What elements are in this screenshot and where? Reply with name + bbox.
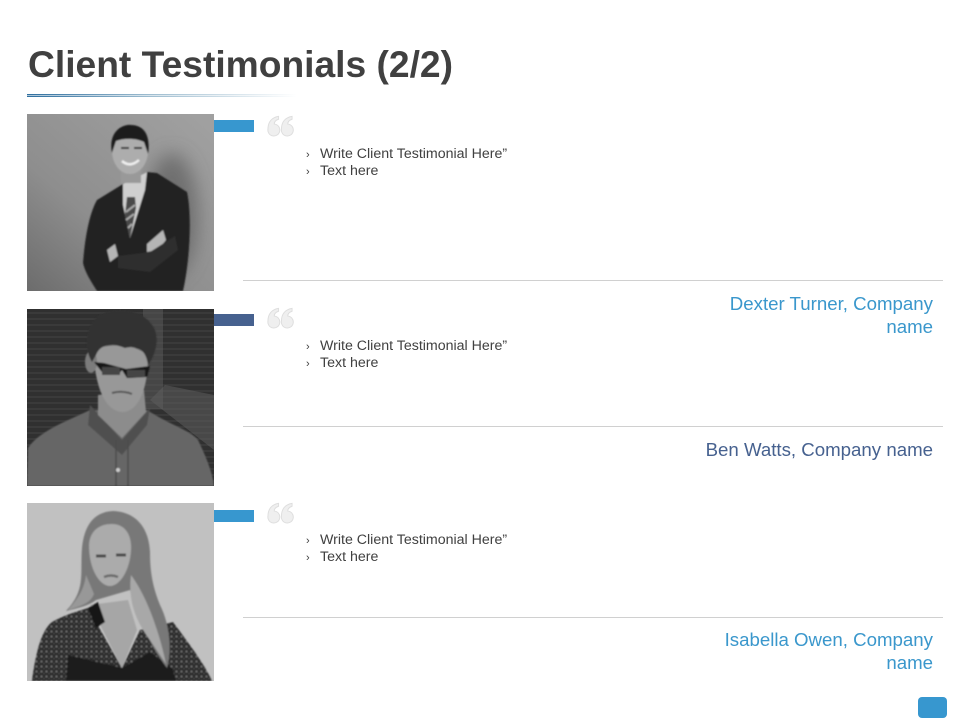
name: Isabella Owen: name — [886, 652, 933, 673]
testimonial text 2: Write Client Testimonial Here” — [320, 338, 507, 354]
testimonial text 3: Write Client Testimonial Here” — [320, 532, 507, 548]
testimonial text 2: › — [306, 341, 310, 353]
testimonial text 3 — [306, 532, 507, 565]
testimonial text 1: › — [306, 149, 310, 161]
quote icon 1 — [268, 116, 294, 136]
testimonial text 1: › — [306, 166, 310, 178]
testimonial text 1: Write Client Testimonial Here” — [320, 146, 507, 162]
title underline — [27, 94, 284, 97]
name: Dexter Turner — [730, 293, 933, 337]
testimonial text 2: › — [306, 358, 310, 370]
page number badge — [918, 697, 947, 718]
testimonial text 2 — [306, 338, 507, 371]
testimonial text 1 — [306, 146, 507, 179]
accent bar 1 — [214, 120, 254, 132]
quote icon 2 — [268, 308, 294, 328]
name: Isabella Owen — [725, 629, 933, 673]
name: Ben Watts: Ben Watts, Company name — [706, 439, 933, 460]
testimonial text 3: › — [306, 552, 310, 564]
photo: Dexter Turner portrait — [27, 114, 214, 291]
name: Dexter Turner: name — [886, 316, 933, 337]
testimonial text 3: › — [306, 535, 310, 547]
accent bar 2 — [214, 314, 254, 326]
name: Isabella Owen: Isabella Owen, Company — [725, 629, 933, 650]
quote icon 3 — [268, 502, 294, 524]
testimonial text 1: Text here — [320, 163, 378, 179]
photo: Ben Watts portrait — [27, 309, 214, 486]
accent bar 3 — [214, 510, 254, 522]
testimonial text 2: Text here — [320, 355, 378, 371]
name: Dexter Turner: Dexter Turner, Company — [730, 293, 933, 314]
photo: Isabella Owen portrait — [27, 503, 214, 681]
testimonial text 3: Text here — [320, 549, 378, 565]
title: Client Testimonials (2/2) — [28, 43, 453, 85]
